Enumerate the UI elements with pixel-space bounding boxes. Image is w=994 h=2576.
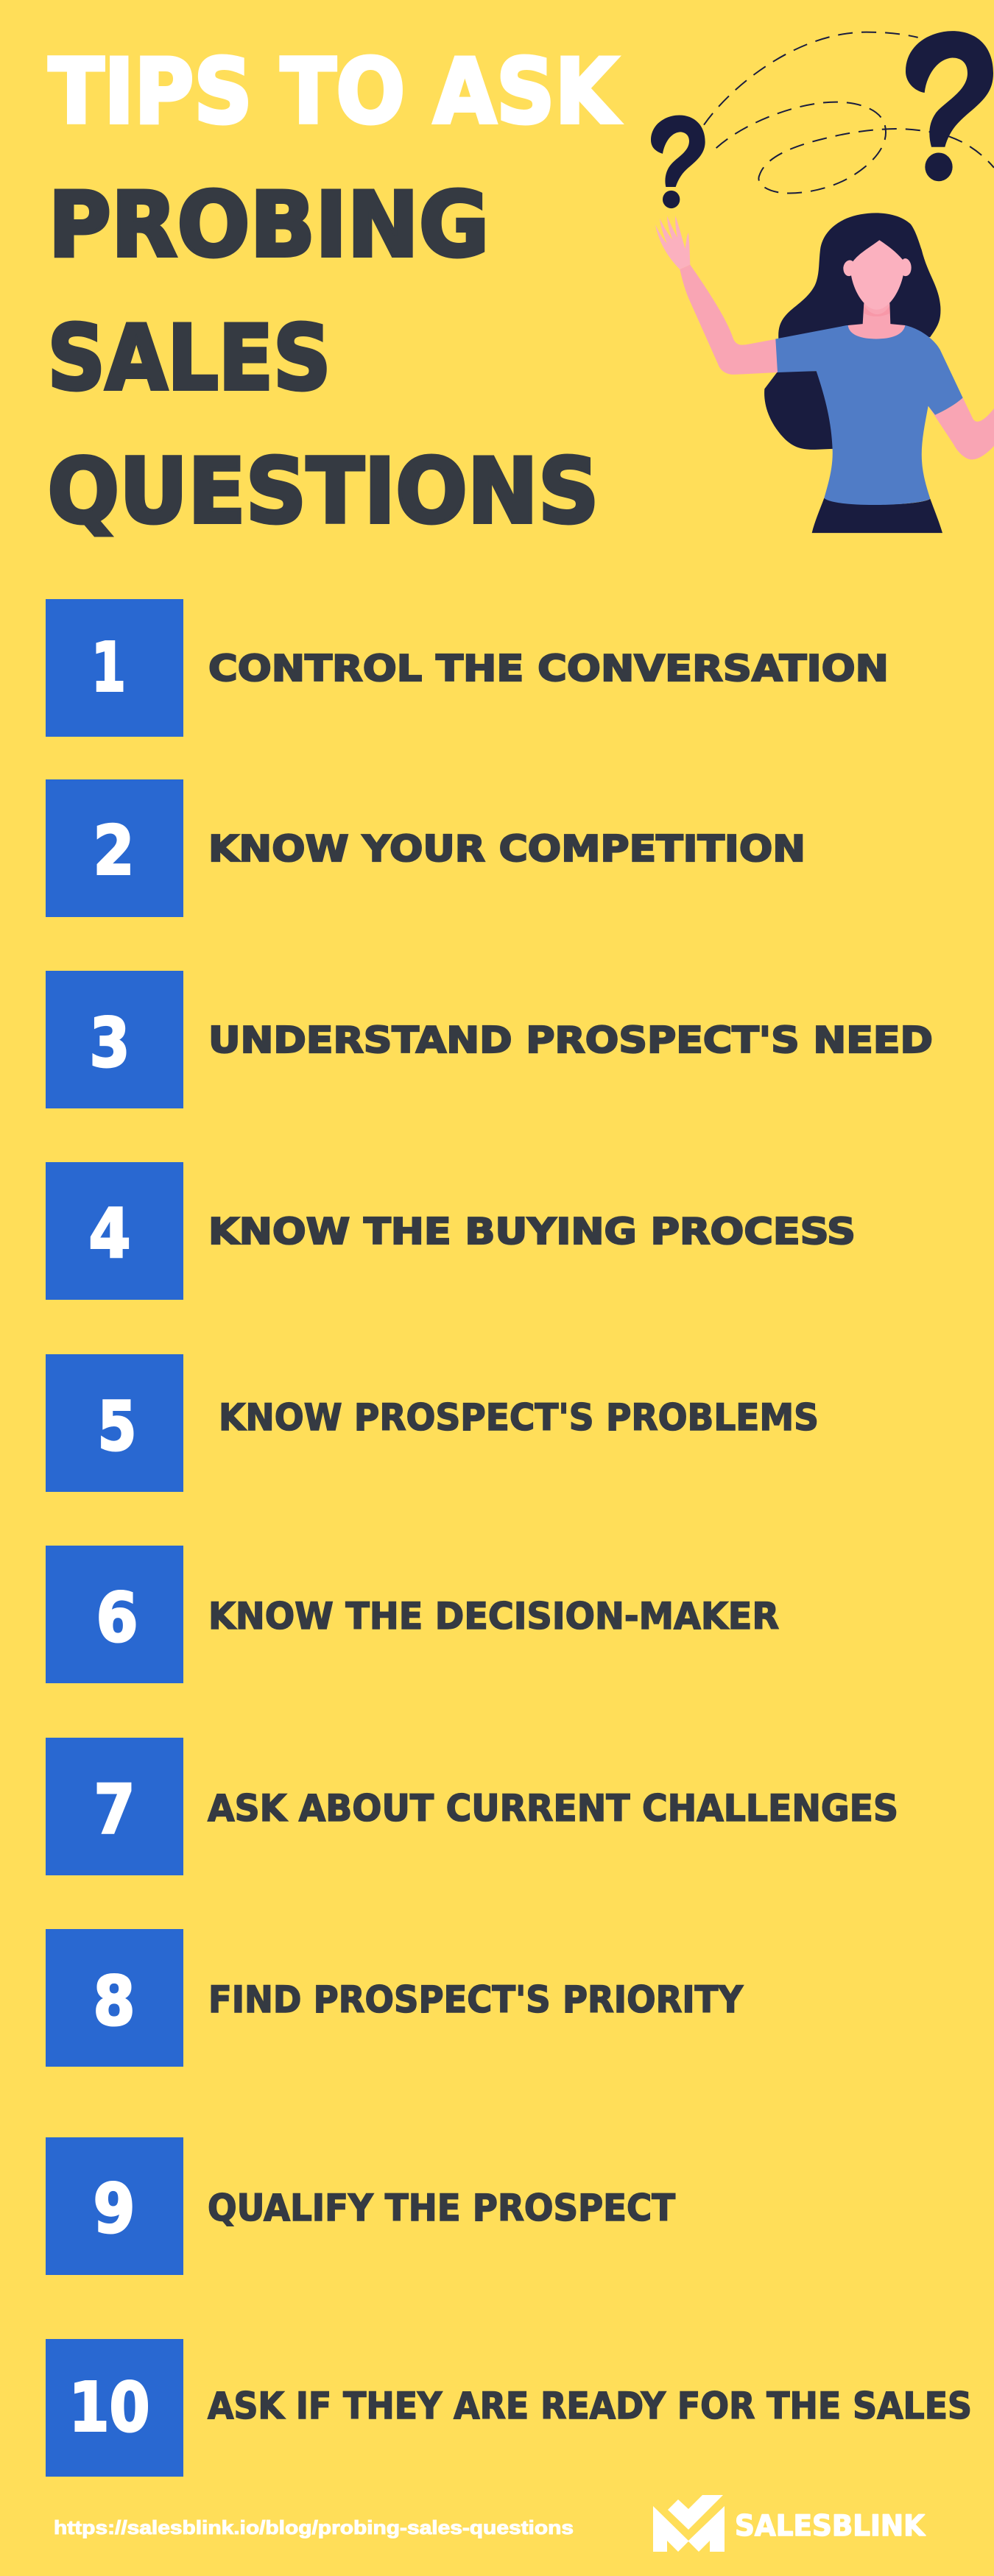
tip 10: 10 (69, 2368, 150, 2446)
tip 3: 3 (90, 1004, 130, 1082)
tip 3: UNDERSTAND PROSPECT'S NEED (208, 1019, 933, 1061)
title: TIPS TO ASK (49, 40, 621, 144)
tip 1: 1 (91, 629, 126, 707)
tip 7: ASK ABOUT CURRENT CHALLENGES (208, 1787, 898, 1830)
tip 4: KNOW THE BUYING PROCESS (208, 1211, 856, 1253)
tip 9 (46, 2137, 675, 2275)
tip 9: 9 (93, 2170, 135, 2248)
illustration: woman with question marks (651, 31, 994, 533)
tip 9: QUALIFY THE PROSPECT (208, 2187, 675, 2229)
icon: large question mark (906, 31, 993, 181)
tip 2: KNOW YOUR COMPETITION (208, 828, 806, 870)
tip 2: 2 (93, 811, 134, 891)
tip 5: 5 (97, 1387, 137, 1466)
tip 7 (46, 1738, 898, 1875)
title: SALES (47, 306, 331, 411)
tip 1: CONTROL THE CONVERSATION (208, 648, 889, 690)
tip 4 (46, 1162, 856, 1300)
tip 6: 6 (96, 1578, 138, 1657)
logo: SalesBlink (653, 2495, 926, 2552)
icon: small question mark (651, 116, 705, 208)
tip 3 (46, 971, 933, 1108)
tip 5 (46, 1354, 819, 1492)
tip 2 (46, 779, 806, 917)
tip 6 (46, 1546, 779, 1683)
url text: https://salesblink.io/blog/probing-sales-questions (54, 2516, 574, 2538)
tip 10 (46, 2339, 972, 2477)
tip 4: 4 (88, 1194, 131, 1273)
tip 7: 7 (94, 1771, 135, 1849)
dashed swirl lines (704, 32, 994, 194)
tip 8: 8 (93, 1962, 135, 2040)
title: QUESTIONS (47, 440, 599, 543)
tip 6: KNOW THE DECISION-MAKER (208, 1595, 779, 1638)
title: PROBING (49, 174, 489, 277)
tip 8 (46, 1929, 744, 2067)
tip 1 (46, 599, 889, 737)
woman figure (655, 213, 994, 533)
tip 5: KNOW PROSPECT'S PROBLEMS (219, 1396, 819, 1439)
tip 8: FIND PROSPECT'S PRIORITY (208, 1978, 744, 2021)
logo: SalesBlink: SALESBLINK (735, 2510, 926, 2543)
title (47, 40, 621, 543)
